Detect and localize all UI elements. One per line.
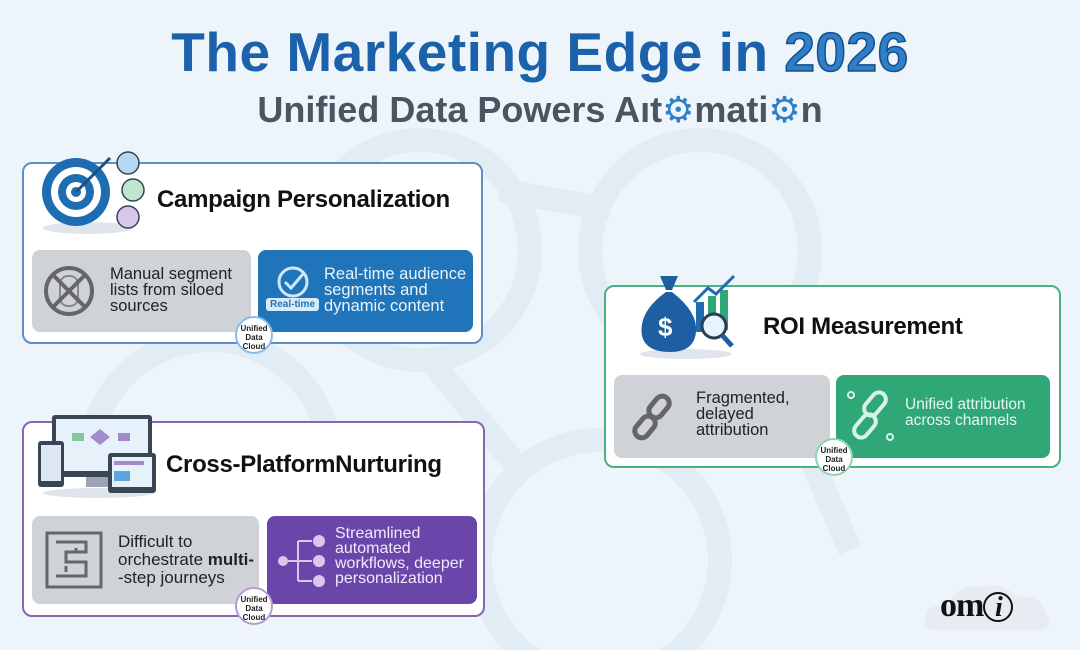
icon: udc (815, 438, 853, 476)
icon: udc: Cloud (823, 464, 845, 473)
panel: campaign personalization (22, 162, 483, 344)
box: manual segments: lists from siloed (110, 281, 224, 299)
box: manual segments: Manual segment (110, 265, 232, 283)
box: real-time: Real-time (270, 299, 315, 310)
icon: udc: Data (245, 604, 263, 613)
icon: maze (46, 532, 102, 588)
icon: target with people (42, 151, 145, 234)
icon: udc: Cloud (243, 613, 265, 622)
panel: cross-platform nurturing (22, 421, 485, 617)
icon: udc: Unified (820, 446, 848, 455)
box: real-time (258, 250, 473, 332)
box: fragmented (614, 375, 830, 458)
box: streamlined: automated (335, 540, 411, 557)
box: unified attribution (836, 375, 1050, 458)
logo: omi (925, 586, 1049, 630)
box: difficult (32, 516, 259, 604)
heading: ROI Measurement (763, 313, 963, 340)
logo: omi: i (995, 592, 1002, 623)
icon: money bag and chart (640, 275, 735, 359)
panel: roi measurement (604, 285, 1061, 468)
heading: Campaign Personalization (157, 186, 450, 213)
box: streamlined: personalization (335, 570, 443, 587)
icon: udc: Data (245, 333, 263, 342)
box: fragmented: delayed (696, 405, 754, 423)
heading: Cross-PlatformNurturing (166, 451, 442, 478)
logo: omi: om (940, 587, 983, 624)
box: real-time: segments and (324, 281, 428, 299)
icon: udc: Cloud (243, 342, 265, 351)
icon: crossed database (44, 266, 94, 316)
box: streamlined: workflows, deeper (335, 555, 464, 572)
icon: udc (235, 316, 273, 354)
box: manual segments (32, 250, 251, 332)
icon: udc (235, 587, 273, 625)
icon: workflow (278, 535, 325, 587)
icon: udc: Unified (240, 324, 268, 333)
icon: broken chain (632, 394, 672, 440)
box: fragmented: attribution (696, 421, 768, 439)
icon: udc: Data (825, 455, 843, 464)
icon: udc: Unified (240, 595, 268, 604)
box: real-time: dynamic content (324, 297, 444, 315)
box: unified attribution: Unified attribution (905, 396, 1026, 413)
title: The Marketing Edge in 2026 (171, 21, 909, 83)
box: fragmented: Fragmented, (696, 389, 790, 407)
box: streamlined (267, 516, 477, 604)
box: difficult: Difficult to (118, 532, 192, 551)
box: difficult: -step journeys (118, 568, 225, 587)
icon: money bag and chart: $ (658, 312, 673, 342)
box: difficult: orchestrate multi- (118, 550, 254, 569)
subtitle: Unified Data Powers Aıt⚙mati⚙n (257, 89, 823, 130)
icon: check (278, 266, 308, 298)
icon: devices (38, 415, 156, 498)
icon: chain (847, 390, 894, 441)
box: unified attribution: across channels (905, 412, 1017, 429)
box: streamlined: Streamlined (335, 525, 420, 542)
box: real-time: Real-time audience (324, 265, 466, 283)
box: manual segments: sources (110, 297, 168, 315)
